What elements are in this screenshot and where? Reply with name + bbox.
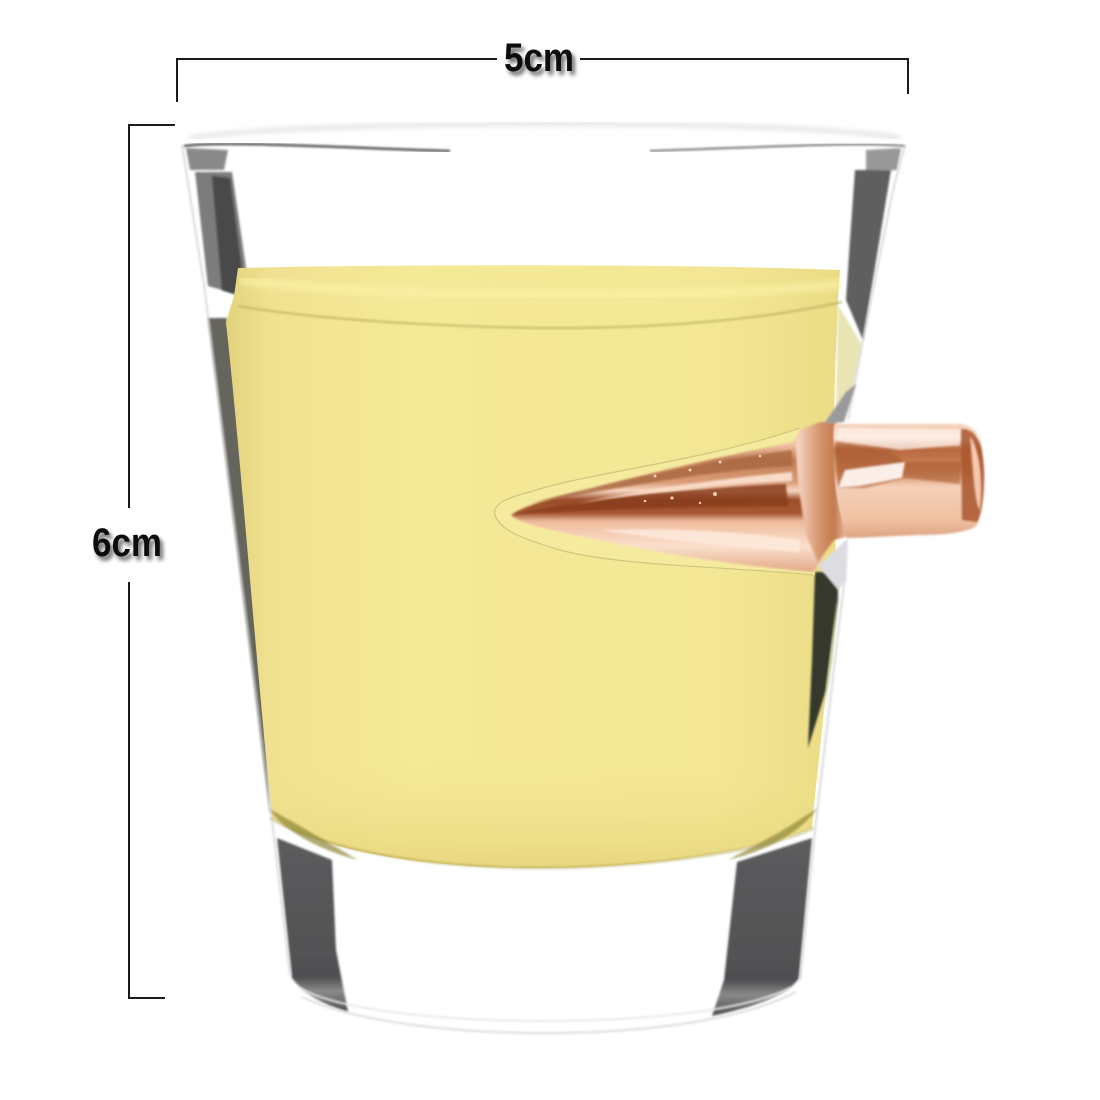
- height label: 6cm: [92, 521, 162, 565]
- glass tear above bullet: [824, 384, 856, 424]
- width bracket: 5cm: [177, 59, 908, 102]
- glass base dark reflections: [277, 838, 812, 1033]
- bullet nose upper shadow: [532, 450, 792, 503]
- bullet collar band: [796, 422, 850, 562]
- glass tear at entry point: [818, 538, 848, 590]
- height bracket: 6cm: [129, 125, 175, 998]
- bullet nose: [511, 424, 832, 572]
- indentation outline around bullet tip: [495, 428, 815, 575]
- bullet rear highlight: [836, 428, 962, 450]
- shot glass: [182, 124, 905, 1033]
- glass rim: [184, 124, 905, 172]
- glass outline: [182, 145, 905, 980]
- bullet end cap: [961, 429, 984, 522]
- bullet nose bright highlight: [575, 472, 792, 504]
- bullet rear dark band: [836, 442, 961, 488]
- bullet nose dark streak: [513, 484, 788, 514]
- bullet rear cylinder: [834, 424, 983, 538]
- bullet nose lower sheen: [600, 529, 800, 552]
- width label: 5cm: [504, 36, 574, 80]
- bullet speckles: [644, 455, 761, 504]
- right wall reflections below and above bullet: [808, 305, 862, 748]
- bullet: [495, 384, 984, 590]
- bullet rear white glare: [838, 462, 905, 488]
- glass wall dark reflections: [195, 170, 891, 815]
- bullet end face: [970, 436, 981, 510]
- liquid: [226, 265, 842, 868]
